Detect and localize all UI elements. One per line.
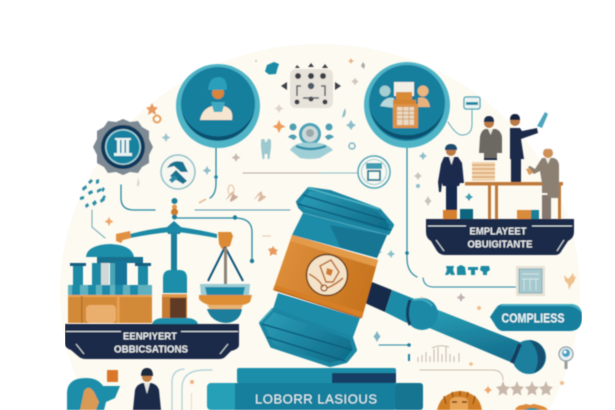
chart: tiny bar sketch (408, 346, 459, 362)
icon: tools circle (161, 155, 195, 189)
decorative accents bottom (190, 380, 194, 410)
icon: court circle (364, 62, 450, 148)
base: labor laws plinth (207, 368, 423, 410)
gavel orange band (273, 235, 378, 318)
scale stand (116, 198, 233, 324)
banner: employer obligations (65, 324, 239, 359)
figure: man bottom left (133, 368, 161, 410)
plinth text: LOBORR LASIOUS (255, 392, 377, 406)
pill text: COMPLIESS (502, 312, 564, 326)
gavel handle (365, 282, 546, 374)
panel: employee obligations scene (426, 112, 574, 255)
banner text: EENPIYERT (123, 330, 178, 342)
icon: magnifier (559, 347, 573, 369)
banner: employee obligations (426, 219, 574, 255)
panel: employer obligations scale (65, 198, 252, 359)
icon: pillar gear badge (93, 119, 153, 175)
building (68, 244, 152, 323)
background blob (60, 44, 580, 410)
icon: document (516, 266, 545, 296)
icon: sphinx (437, 391, 482, 410)
gavel emblem (306, 254, 348, 296)
gavel head lower (260, 293, 360, 365)
paper stack (472, 162, 495, 181)
gavel (260, 188, 546, 374)
figure: man left (438, 144, 464, 210)
icon: orange sprig (564, 273, 576, 290)
blocks (443, 209, 539, 219)
banner text: OBUIGITANTE (468, 238, 532, 250)
icon: person medallion (288, 123, 334, 159)
table (465, 182, 563, 219)
banner text: EMPLAYEET (470, 226, 527, 238)
connector lines (92, 110, 516, 410)
icon: worker circle (176, 64, 260, 148)
icon: small card (464, 97, 480, 109)
main illustration (65, 58, 582, 410)
icon: pale stars row (484, 381, 564, 396)
scale pan (199, 247, 252, 323)
icon: bottom gear (515, 404, 548, 410)
badge: compliance pill (490, 304, 582, 331)
figure: man pointing (510, 112, 548, 182)
figure: man in grey (526, 148, 559, 219)
figure: man centre (479, 116, 502, 160)
icon: puzzle grid (281, 63, 341, 108)
gavel head upper (292, 188, 392, 258)
icon: teal machine (67, 370, 120, 410)
decorative small icons (104, 58, 481, 366)
icon: law medallion (358, 156, 390, 188)
icon: plant scatter (80, 179, 106, 208)
icon: teal figures row (445, 265, 490, 275)
banner text: OBBICSATIONS (114, 344, 188, 356)
